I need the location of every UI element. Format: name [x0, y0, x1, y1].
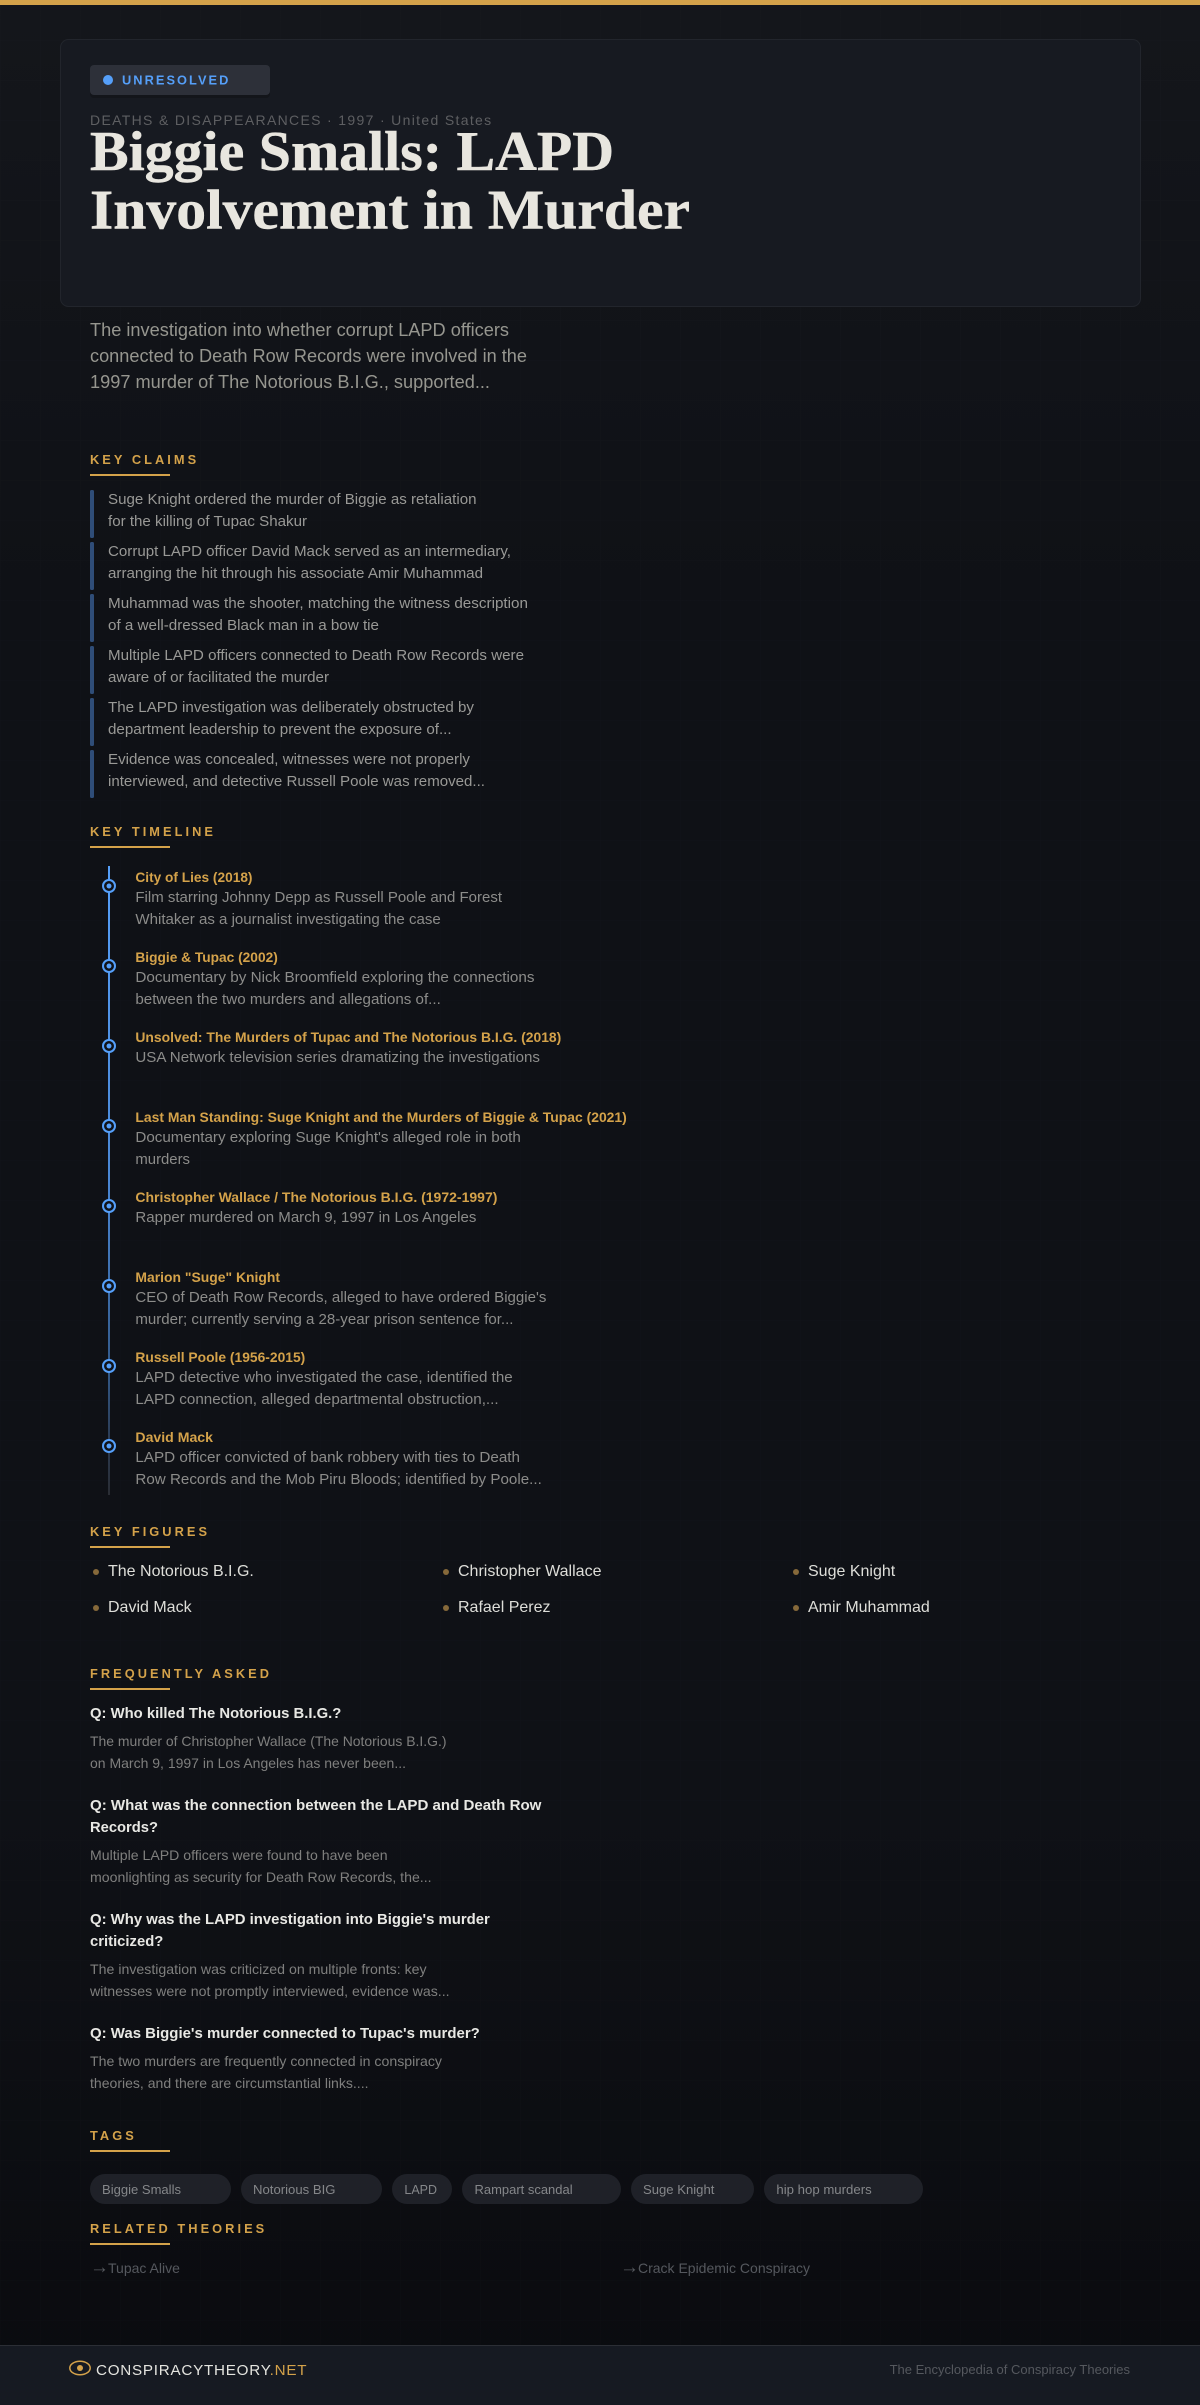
faq 1: Q: Who killed The Notorious B.I.G.? [90, 1705, 341, 1722]
heading: key figures [90, 1524, 210, 1548]
title [90, 121, 690, 242]
faq 1: on March 9, 1997 in Los Angeles has never been... [90, 1755, 406, 1771]
event: Last Man Standing: Last Man Standing: Suge Knight and the Murders of Biggie & Tupac (2021) [135, 1109, 627, 1125]
tag: hip hop murders: hip hop murders [776, 2182, 872, 2197]
event: Christopher Wallace: Christopher Wallace / The Notorious B.I.G. (1972-1997) [135, 1189, 497, 1205]
faq 4: The two murders are frequently connected in conspiracy [90, 2053, 442, 2069]
heading: key timeline [90, 824, 216, 848]
related link: Crack Epidemic Conspiracy: → [620, 2257, 639, 2278]
claim 5: department leadership to prevent the exposure of... [108, 721, 452, 738]
faq 1: The murder of Christopher Wallace (The Notorious B.I.G.) [90, 1733, 446, 1749]
event: Unsolved [103, 1029, 561, 1066]
event: Biggie & Tupac: Biggie & Tupac (2002) [135, 949, 278, 965]
faq 4: theories, and there are circumstantial links.... [90, 2075, 368, 2091]
related link: Tupac Alive: Tupac Alive [108, 2260, 180, 2276]
event: Suge Knight: murder; currently serving a 28-year prison sentence for... [135, 1311, 514, 1328]
icon: eye logo [70, 2361, 90, 2375]
claim 1: for the killing of Tupac Shakur [108, 513, 307, 530]
status badge: unresolved: UNRESOLVED [122, 72, 230, 88]
section: related theories [90, 2221, 810, 2278]
event: City of Lies: Whitaker as a journalist investigating the case [135, 911, 441, 928]
faq 1 [90, 1705, 446, 1771]
claim 6 [90, 750, 485, 798]
heading: tags: TAGS [90, 2128, 137, 2143]
event: City of Lies: City of Lies (2018) [135, 869, 252, 885]
figure: David Mack: David Mack [108, 1599, 193, 1616]
event: Christopher Wallace [103, 1189, 497, 1226]
figure: Amir Muhammad: Amir Muhammad [808, 1599, 930, 1616]
faq 2: Q: What was the connection between the LAPD and Death Row [90, 1797, 542, 1814]
heading: frequently asked: FREQUENTLY ASKED [90, 1666, 272, 1681]
logo wordmark: CONSPIRACYTHEORY.NET [96, 2362, 307, 2379]
event: David Mack [103, 1429, 542, 1488]
footer [0, 2345, 1200, 2405]
claim 5 [90, 698, 474, 746]
tag: Suge Knight [631, 2174, 754, 2204]
panel: hero header [60, 40, 1140, 306]
related link: Tupac Alive: → [90, 2257, 109, 2278]
footer tagline: The Encyclopedia of Conspiracy Theories [890, 2362, 1130, 2377]
summary text [90, 320, 527, 392]
claim 4 [90, 646, 524, 694]
event: Suge Knight: CEO of Death Row Records, alleged to have ordered Biggie's [135, 1289, 547, 1306]
figure: Rafael Perez: Rafael Perez [458, 1599, 550, 1616]
event: Biggie & Tupac: Documentary by Nick Broomfield exploring the connections [135, 969, 535, 986]
section: key claims [90, 452, 528, 798]
claim 3: Muhammad was the shooter, matching the witness description [108, 595, 528, 612]
faq 2: moonlighting as security for Death Row Records, the... [90, 1869, 432, 1885]
claim 1: Suge Knight ordered the murder of Biggie as retaliation [108, 491, 476, 508]
event: Biggie & Tupac [103, 949, 535, 1008]
tag: Rampart scandal: Rampart scandal [474, 2182, 573, 2197]
tag: Notorious BIG [241, 2174, 382, 2204]
heading: related theories: RELATED THEORIES [90, 2221, 267, 2236]
claim 6: Evidence was concealed, witnesses were not properly [108, 751, 470, 768]
summary text: The investigation into whether corrupt LAPD officers [90, 320, 509, 340]
faq 4 [90, 2025, 480, 2091]
claim 2: arranging the hit through his associate Amir Muhammad [108, 565, 483, 582]
section: key figures [90, 1524, 930, 1616]
claim 1 [90, 490, 476, 538]
timeline rail [108, 866, 110, 1495]
claim 4: Multiple LAPD officers connected to Death Row Records were [108, 647, 524, 664]
tag: LAPD [392, 2174, 452, 2204]
section: key timeline [90, 824, 627, 1495]
faq 3 [89, 1911, 490, 1999]
top accent bar [0, 0, 1200, 5]
summary text: connected to Death Row Records were involved in the [90, 346, 527, 366]
event: Last Man Standing: Documentary exploring Suge Knight's alleged role in both [135, 1129, 521, 1146]
tag: Biggie Smalls [90, 2174, 231, 2204]
faq 3: The investigation was criticized on multiple fronts: key [90, 1961, 427, 1977]
figure: Suge Knight: Suge Knight [808, 1563, 896, 1580]
event: Last Man Standing: murders [135, 1151, 190, 1168]
title: Involvement in Murder [90, 180, 690, 242]
heading: key claims: KEY CLAIMS [90, 452, 199, 467]
faq 2 [90, 1797, 542, 1885]
heading: key figures: KEY FIGURES [90, 1524, 210, 1539]
section: tags [90, 2128, 923, 2204]
event: David Mack: David Mack [135, 1429, 213, 1445]
heading: tags [90, 2128, 170, 2152]
tag: hip hop murders [764, 2174, 923, 2204]
claim 3 [90, 594, 528, 642]
claim 2: Corrupt LAPD officer David Mack served as an intermediary, [108, 543, 511, 560]
heading: key timeline: KEY TIMELINE [90, 824, 216, 839]
heading: key claims [90, 452, 199, 476]
event: Unsolved: Unsolved: The Murders of Tupac and The Notorious B.I.G. (2018) [135, 1029, 561, 1045]
related link: Crack Epidemic Conspiracy: Crack Epidemic Conspiracy [638, 2260, 810, 2276]
event: Biggie & Tupac: between the two murders and allegations of... [135, 991, 441, 1008]
event: David Mack: Row Records and the Mob Piru Bloods; identified by Poole... [135, 1471, 542, 1488]
event: Suge Knight: Marion "Suge" Knight [135, 1269, 280, 1285]
event: Suge Knight [103, 1269, 547, 1328]
claim 5: The LAPD investigation was deliberately obstructed by [108, 699, 474, 716]
section: frequently asked [89, 1666, 542, 2091]
summary text: 1997 murder of The Notorious B.I.G., supported... [90, 372, 490, 392]
claim 6: interviewed, and detective Russell Poole was removed... [108, 773, 485, 790]
event: Russell Poole: LAPD connection, alleged departmental obstruction,... [135, 1391, 499, 1408]
faq 4: Q: Was Biggie's murder connected to Tupac's murder? [90, 2025, 480, 2042]
claim 2 [90, 542, 511, 590]
faq 3: witnesses were not promptly interviewed, evidence was... [89, 1983, 450, 1999]
event: Russell Poole: LAPD detective who investigated the case, identified the [135, 1369, 513, 1386]
title: Biggie Smalls: LAPD [90, 121, 614, 183]
event: City of Lies [103, 869, 503, 928]
event: City of Lies: Film starring Johnny Depp as Russell Poole and Forest [135, 889, 503, 906]
event: Christopher Wallace: Rapper murdered on March 9, 1997 in Los Angeles [135, 1209, 477, 1226]
figure: Christopher Wallace: Christopher Wallace [458, 1563, 602, 1580]
event: Unsolved: USA Network television series dramatizing the investigations [135, 1049, 540, 1066]
tag: Biggie Smalls: Biggie Smalls [102, 2182, 181, 2197]
status badge: unresolved [90, 65, 270, 98]
faq 2: Multiple LAPD officers were found to have been [90, 1847, 388, 1863]
event: Last Man Standing [103, 1109, 627, 1168]
tag: Suge Knight: Suge Knight [643, 2182, 715, 2197]
faq 3: criticized? [90, 1933, 163, 1950]
tag: LAPD: LAPD [404, 2182, 437, 2197]
claim 4: aware of or facilitated the murder [108, 669, 329, 686]
event: Russell Poole [103, 1349, 513, 1408]
faq 3: Q: Why was the LAPD investigation into Biggie's murder [90, 1911, 490, 1928]
category and date line: DEATHS & DISAPPEARANCES · 1997 · United States [90, 112, 492, 128]
claim 3: of a well-dressed Black man in a bow tie [108, 617, 379, 634]
faq 2: Records? [90, 1819, 158, 1836]
tag: Notorious BIG: Notorious BIG [253, 2182, 336, 2197]
event: Russell Poole: Russell Poole (1956-2015) [135, 1349, 305, 1365]
figure: The Notorious B.I.G.: The Notorious B.I.G. [108, 1563, 254, 1580]
event: David Mack: LAPD officer convicted of bank robbery with ties to Death [135, 1449, 520, 1466]
tag: Rampart scandal [462, 2174, 621, 2204]
